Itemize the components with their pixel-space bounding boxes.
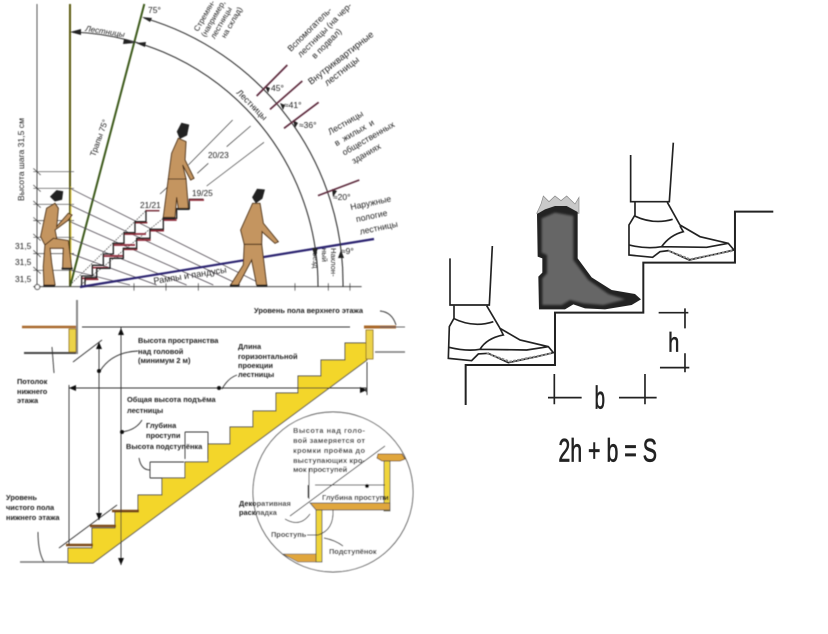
label: angle values: 45° [271,83,284,93]
label: incline: Наклон- [329,248,338,277]
label: tread depth detail: Глубина проступи [322,493,389,502]
hatch lines of stair angles [70,188,263,285]
label: steep stairs: (например, [199,0,227,38]
label: ramps: Рампы и пандусы [153,265,227,286]
label: 31.5 values: 31,5 [15,274,32,284]
stair outline [466,212,773,405]
shoe: upper [629,143,734,260]
detail: tread main [310,503,390,510]
panel: stair angle diagram [15,0,403,291]
marker: origin circle [35,284,40,290]
label: apartment stairs: лестницы [322,55,361,88]
arrows on arcs [70,17,344,258]
label: riser: Подступёнок [329,547,377,556]
labels: angle diagram [15,0,403,286]
dimension b [548,374,657,404]
stair pitch lines [70,120,264,285]
person: climbing left [41,191,73,286]
label: apartment stairs: Внутриквартирные [306,29,376,87]
yellow stair stringer [68,343,367,563]
stairs: steps 19/25 [85,199,204,286]
boot shading [542,213,625,305]
label: angle values: ≈9° [341,246,354,256]
label: angle values: ≈41° [284,100,302,110]
label: step height: Высота шага 31,5 см [16,118,26,201]
dimension h [659,308,689,372]
label: ship ladders 75: Трапы 75° [88,118,110,158]
floors and structure [20,300,405,562]
opening joist top right [366,330,373,359]
person: walking on ramp [230,189,278,286]
detail: tread upper [377,454,405,461]
label: incline: ный [320,248,329,262]
panel: staircase section [6,300,413,572]
label: horizontal projection: лестницы [238,370,274,379]
label: headroom note: кромки проёма до [293,446,365,455]
detail: riser lower [316,510,322,562]
tread boards [66,511,139,545]
label: residential stairs: Лестницы [326,108,365,137]
label: step ratios: 20/23 [208,150,229,160]
label: auxiliary stairs: лестницы (на чер- [295,0,354,59]
limit marks for angle ranges [257,65,359,196]
label: horizontal projection: горизонтальной [238,352,298,361]
label: outdoor stairs: Наружные [349,193,392,212]
detail dot [365,484,369,488]
labels: staircase section [6,306,389,556]
label: upper floor: Уровень пола верхнего этажа [254,306,364,315]
boot: dark middle [537,196,641,309]
label: residential stairs: общественных [340,119,397,157]
label: horizontal projection: Длина [238,342,262,351]
detail circle [253,412,413,572]
label: headroom note: Высота над голо- [293,426,366,435]
label: steep stairs: лестницы [209,5,234,40]
label: steep stairs: на склад) [219,5,244,40]
label: outdoor stairs: лестницы [359,219,399,237]
dimension dots [69,328,367,565]
panel: step formula diagram [448,143,773,469]
label: residential stairs: зданиях [350,141,383,166]
label: riser height: Высота подступёнка [126,442,203,451]
label: headroom: над головой [138,347,184,356]
label: lower floor: Уровень [6,493,37,502]
boot body [537,206,641,309]
label: tread: Проступь [271,530,307,539]
label: tread depth: проступи [146,431,181,440]
label: ladders arc: Лестницы [235,87,269,122]
label: lower ceiling: Потолок [17,377,48,386]
label: residential stairs: в жилых и [332,117,376,148]
shoe: lower [448,246,553,363]
boot hair tips [537,196,579,213]
label: step ratios: 19/25 [192,188,213,198]
label: auxiliary stairs: в подвал) [309,26,344,60]
label: tread depth: Глубина [146,421,177,430]
label: total rise: лестницы [127,406,163,415]
detail: riser upper [384,461,390,511]
label: lower ceiling: нижнего [17,387,48,396]
formula: 2h + b = S [558,432,657,469]
person: climbing stairs [163,123,194,218]
label: b: b [595,381,605,416]
label: lower floor: нижнего этажа [6,513,60,522]
label: auxiliary stairs: Вспомогатель- [285,5,334,53]
detail: tread lower [283,554,316,562]
label: 31.5 values: 31,5 [15,257,32,267]
label: ladders top: Лестницы [84,24,126,39]
angle guide lines and baseline [33,4,362,291]
label: headroom note: выступающих кро- [293,456,366,465]
label: 75 degrees: 75° [148,5,161,15]
label: step ratios: 21/21 [140,200,161,210]
stairs: steps 21/21 [82,211,159,286]
detail lines [285,446,385,546]
label: headroom: (минимум 2 м) [138,356,191,365]
label: incline: въезд [311,248,320,269]
label: headroom note: вой замеряется от [293,436,365,445]
dimension lines [38,311,396,565]
label: total rise: Общая высота подъёма [127,395,217,404]
label: decorative trim: Декоративная [239,499,291,508]
label: lower floor: чистого пола [6,503,55,512]
label: 31.5 values: 31,5 [15,241,32,251]
angle arcs [72,18,343,287]
opening joist top left [69,329,76,352]
ramp line [80,239,374,287]
label: outdoor stairs: пологие [355,208,388,224]
label: headroom note: мок проступей [293,465,348,474]
label: h: h [668,328,679,358]
label: horizontal projection: проекции [238,361,273,370]
label: angle values: ≈20° [333,192,351,202]
label: lower ceiling: этажа [17,396,39,405]
label: headroom: Высота пространства [138,336,219,345]
label: decorative trim: раскладка [239,508,278,517]
label: angle values: ≈36° [299,120,317,130]
